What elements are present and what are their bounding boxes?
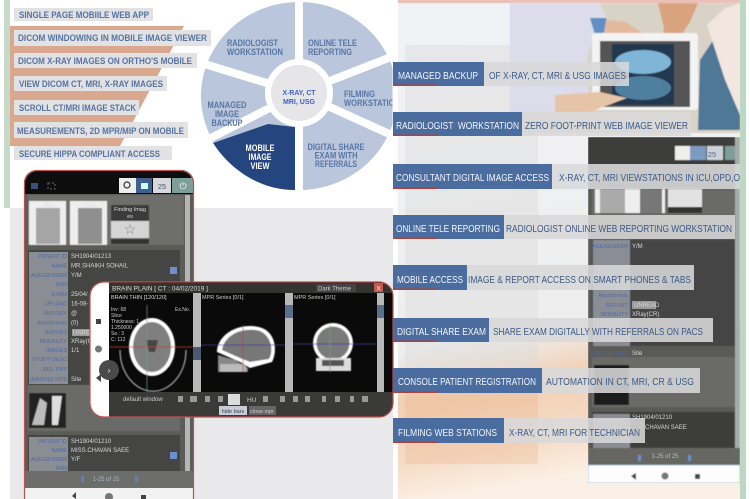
phone header bar: ⏻	[179, 181, 187, 191]
right phone screen text: ☆	[676, 170, 688, 186]
list item: dicom windowing: DICOM WINDOWING IN MOBILE IMAGE VIEWER	[18, 33, 207, 43]
pagination bar	[24, 471, 194, 488]
patient table one: REF. PHY	[43, 367, 67, 373]
list item: secure access: SECURE HIPPA COMPLIANT ACCESS	[19, 149, 160, 159]
feature row: digital share exam	[393, 318, 713, 342]
viewer toolbar: hide bars	[222, 409, 245, 415]
label: mobile image view: MOBILE	[246, 143, 274, 153]
feature row: consultant digital image access	[393, 164, 740, 189]
pagination bar: 1-25 of 25	[92, 477, 120, 483]
viewport: axial CT: C: 112	[111, 337, 126, 343]
label: radiologist workstation: RADIOLOGIST	[227, 38, 278, 48]
label: filming workstation	[344, 90, 392, 106]
patient table one	[28, 250, 180, 385]
right phone screen text: Attachments	[598, 293, 628, 299]
list item: measurements	[14, 122, 188, 138]
list item: dicom x-ray	[14, 53, 197, 68]
patient table one: MODALITY	[39, 339, 67, 345]
patient table two: AGE/GENDER	[31, 457, 67, 463]
list item: dicom windowing	[14, 30, 211, 46]
list item: dicom x-ray: DICOM X-RAY IMAGES ON ORTHO'S MOBILE	[18, 56, 192, 66]
patient table one: UNREAD	[73, 330, 99, 336]
segmented wheel diagram	[198, 0, 400, 195]
right page background	[398, 0, 746, 499]
patient table one: 25/04/	[71, 292, 88, 298]
patient table one: 1/1	[71, 348, 80, 354]
right phone: portrait web viewer background	[588, 137, 740, 483]
landscape phone: brain CT viewer	[90, 282, 393, 417]
phone header bar: 25	[158, 182, 166, 191]
viewport: sagittal MPR	[201, 295, 285, 372]
phone navigation bar	[24, 488, 194, 499]
label: online tele reporting: REPORTING	[308, 47, 352, 57]
patient table two: SH1904/01210	[71, 439, 112, 445]
feature row: managed backup: MANAGED BACKUP	[398, 70, 478, 82]
patient table one: IMAGES	[46, 348, 67, 354]
patient table two: NAME	[51, 448, 67, 454]
landscape phone outline	[90, 282, 393, 417]
label: managed image backup: BACKUP	[212, 118, 242, 128]
patient table two: PATIENT ID	[38, 439, 67, 445]
viewport: axial CT: Se.: 3	[111, 331, 124, 337]
viewport: axial CT: BRAIN THIN [120/120]	[111, 295, 167, 301]
feature row: online tele reporting	[393, 215, 735, 239]
label: digital share exam: REFERRALS	[315, 159, 357, 169]
viewer title bar: BRAIN PLAIN [ CT : 04/02/2019 ]	[112, 286, 208, 292]
right phone screen text: IMAGING SITE	[591, 351, 628, 357]
right phone screen text: 1-25 of 25	[651, 454, 679, 460]
patient table one: @	[71, 311, 77, 317]
patient table one: AGE/GENDER	[31, 273, 67, 279]
viewer toolbar: default window	[123, 397, 163, 403]
feature row: online tele reporting: ONLINE TELE REPORTING	[396, 223, 500, 235]
phone side bar	[90, 282, 109, 417]
feature row: console patient registration: CONSOLE PATIENT REGISTRATION	[398, 376, 536, 388]
label: mobile image view: VIEW	[250, 161, 270, 171]
viewer title bar: X	[376, 286, 381, 292]
left phone outline	[24, 170, 194, 499]
feature row: filming web stations	[393, 418, 645, 443]
photo: doctors viewing x-ray on tablet	[510, 3, 740, 133]
left phone: portrait web viewer: (0/1)	[84, 203, 95, 209]
segment: mobile image view	[213, 124, 295, 190]
label: managed image backup: MANAGED	[208, 100, 247, 110]
viewer title bar	[109, 283, 393, 293]
list item: view dicom: VIEW DICOM CT, MRI, X-RAY IMAGES	[19, 79, 163, 89]
label: online tele reporting	[308, 40, 357, 55]
feature row: managed backup	[393, 62, 629, 86]
patient table two: PRN	[56, 466, 67, 472]
feature row: digital share exam: DIGITAL SHARE EXAM	[397, 326, 486, 338]
label: mobile image view	[246, 144, 274, 169]
patient table one: EXAM	[52, 292, 68, 298]
label: digital share exam: DIGITAL SHARE	[308, 142, 364, 152]
label: radiologist workstation	[227, 40, 282, 55]
viewport: axial CT: Inv: 68	[111, 307, 126, 313]
thumbnail panel	[28, 195, 184, 245]
label: digital share exam: EXAM WITH	[314, 150, 358, 160]
patient table one: NAME	[51, 264, 67, 270]
label: mobile image view: IMAGE	[248, 152, 272, 162]
patient table one: HISTORY	[43, 311, 67, 317]
left page background	[0, 0, 398, 499]
viewport: coronal MPR: MPR Series [0/1]	[294, 295, 336, 301]
patient table one: REPORT	[45, 330, 68, 336]
list item: single page app: SINGLE PAGE MOBIILE WEB APP	[19, 10, 149, 20]
right phone screen text: AGE/GENDER	[592, 244, 628, 250]
label: filming workstation: FILMING	[344, 89, 375, 99]
phone header bar	[24, 170, 194, 194]
viewport: axial CT: Thickness: 1	[111, 319, 139, 325]
patient table one: STUDY DESC	[32, 357, 67, 363]
list item: view dicom	[14, 76, 167, 91]
viewport: axial CT: 1.250000	[111, 325, 132, 331]
feature row: mobile access: IMAGE & REPORT ACCESS ON SMART PHONES & TABS	[468, 274, 691, 286]
left phone: portrait web viewer: es	[127, 214, 133, 220]
viewer toolbar: HU	[247, 397, 257, 404]
patient table one: Y/M	[71, 273, 82, 279]
patient table one: Site	[71, 377, 82, 383]
feature row: radiologist workstation	[393, 112, 691, 136]
landscape phone: brain CT viewer: ›	[108, 366, 111, 375]
right phone screen text: SH1904/01210	[632, 415, 673, 421]
viewer title bar: Dark Theme	[318, 286, 352, 292]
label: radiologist workstation: WORKSTATION	[227, 47, 283, 57]
right phone screen text: Y/M	[632, 244, 643, 250]
right phone screen text: Site	[632, 351, 643, 357]
label: managed image backup: IMAGE	[215, 109, 239, 119]
viewport: axial CT	[109, 295, 193, 392]
list item: measurements: MEASUREMENTS, 2D MPR/MIP ON MOBILE	[17, 126, 184, 136]
right phone screen text	[591, 150, 716, 460]
patient table one: PATIENT ID	[38, 254, 67, 260]
viewport: coronal MPR	[293, 295, 377, 372]
viewport: axial CT: Ex.No.	[175, 307, 190, 313]
label: online tele reporting: ONLINE TELE	[308, 38, 357, 48]
feature row: filming web stations: X-RAY, CT, MRI FOR TECHNICIAN	[509, 427, 640, 439]
list item: scroll stack: SCROLL CT/MRI IMAGE STACK	[19, 103, 136, 113]
left phone: portrait web viewer: (0/1)	[43, 203, 54, 209]
patient table one: (0)	[71, 320, 78, 326]
patient table one: Attachments	[37, 320, 67, 326]
label: digital share exam	[308, 144, 364, 167]
right phone screen text: UNREAD	[634, 303, 660, 309]
patient table one: SH1904/01213	[71, 254, 112, 260]
right phone screen text: REPORT	[606, 303, 629, 309]
patient table one: MR.SHAIKH SOHAIL	[71, 264, 129, 270]
right phone screen text: XRay(CR)	[632, 312, 659, 318]
viewer toolbar	[109, 392, 393, 417]
label: filming workstation: WORKSTATION	[344, 98, 400, 108]
patient table two	[28, 435, 180, 472]
patient table two: Y/F	[71, 457, 81, 463]
foot x-ray panel	[28, 385, 180, 431]
right phone screen text: CHAVAN SAEE	[645, 425, 687, 431]
viewer toolbar: close mpr	[250, 409, 274, 415]
patient table one: IMAGING SITE	[30, 377, 67, 383]
feature row: managed backup: OF X-RAY, CT, MRI & USG IMAGES	[489, 70, 626, 82]
feature row: console patient registration	[393, 368, 700, 393]
label: managed image backup	[208, 102, 246, 126]
salmon trapezoid behind feature list	[10, 26, 184, 146]
feature row: radiologist workstation: ZERO FOOT-PRINT WEB IMAGE VIEWER	[525, 120, 688, 132]
left phone: portrait web viewer: ☆	[124, 221, 136, 237]
wheel hub	[271, 65, 327, 121]
feature row: consultant digital image access: CONSULTANT DIGITAL IMAGE ACCESS	[396, 172, 549, 184]
patient table one: UPLOAD	[45, 302, 67, 308]
list item: single page app	[14, 8, 153, 21]
feature row: mobile access	[393, 265, 694, 290]
wheel hub: X-RAY, CT	[282, 88, 316, 97]
feature row: filming web stations: FILMING WEB STATIONS	[398, 427, 497, 439]
left phone: portrait web viewer	[24, 170, 194, 499]
patient table two: MISS.CHAVAN SAEE	[71, 448, 129, 454]
viewport: axial CT: Slice	[111, 313, 122, 319]
left phone: portrait web viewer: Finding Imag	[114, 207, 146, 213]
patient table one: XRay(C	[71, 339, 93, 345]
feature row: mobile access: MOBILE ACCESS	[397, 274, 463, 286]
list item: secure access	[14, 146, 172, 160]
wheel hub: MRI, USG	[283, 97, 315, 106]
feature row: console patient registration: AUTOMATION IN CT, MRI, CR & USG	[546, 376, 694, 388]
right phone screen text: 25	[708, 150, 716, 159]
feature row: radiologist workstation: RADIOLOGIST WORKSTATION	[396, 120, 519, 132]
feature list	[14, 8, 211, 160]
right phone screen text: MODALITY	[600, 312, 628, 318]
viewport: sagittal MPR: MPR Series [0/1]	[202, 295, 244, 301]
list item: scroll stack	[14, 100, 139, 115]
patient table one: PRN	[56, 282, 67, 288]
patient table one: 16-08-	[71, 302, 88, 308]
